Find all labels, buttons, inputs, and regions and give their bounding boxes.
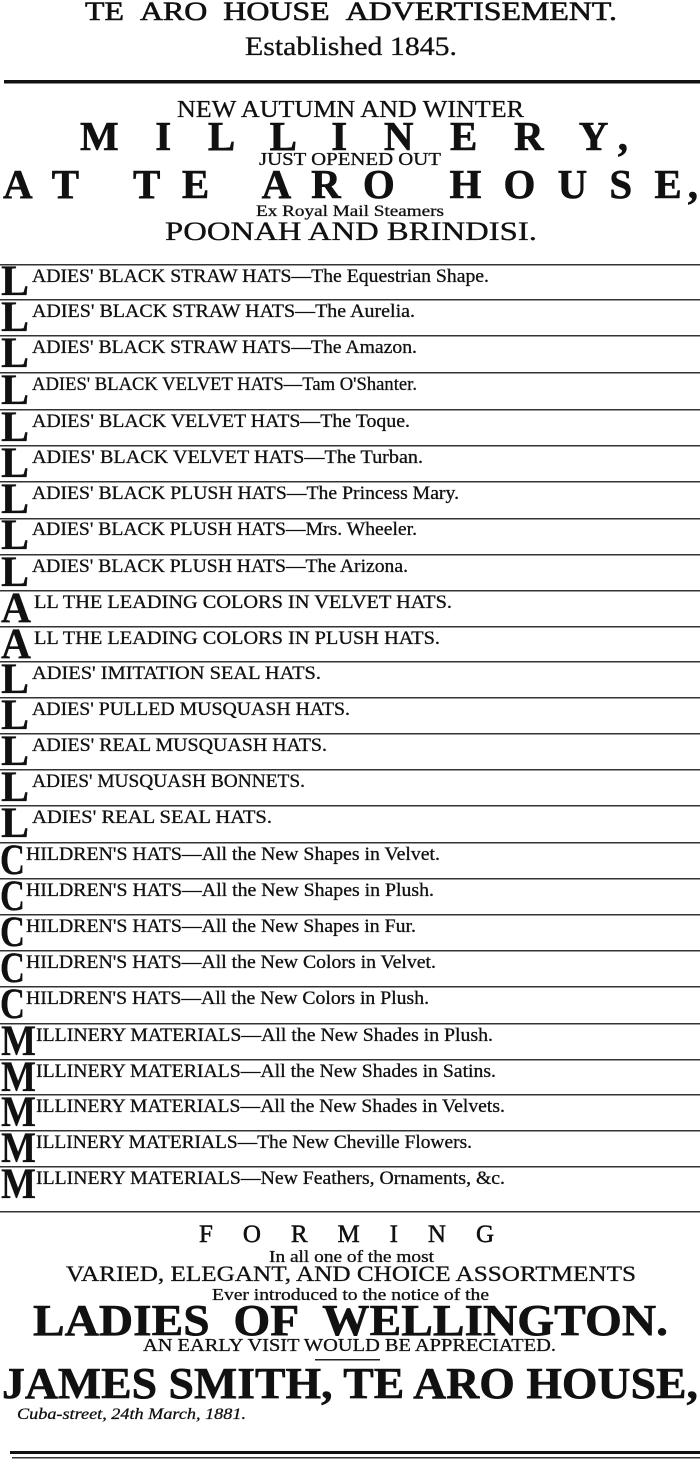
announcement heading (3, 97, 698, 246)
row 14 (0, 728, 700, 775)
row 23: ILLINERY MATERIALS—All the New Shades in Satins. (36, 1062, 496, 1082)
varied assortments: VARIED, ELEGANT, AND CHOICE ASSORTMENTS (66, 1261, 636, 1286)
row 3: L (1, 330, 29, 377)
at te aro house headline: A T T E A R O H O U S E, (3, 161, 698, 207)
james smith te aro house: JAMES SMITH, TE ARO HOUSE, (2, 1359, 698, 1408)
row 20: C (0, 945, 25, 992)
row 4 (0, 367, 700, 414)
row 3 (0, 330, 700, 377)
row 8: ADIES' BLACK PLUSH HATS—Mrs. Wheeler. (32, 520, 417, 540)
row 4: ADIES' BLACK VELVET HATS—Tam O'Shanter. (32, 375, 417, 395)
row 19: HILDREN'S HATS—All the New Shapes in Fur. (26, 917, 416, 937)
row 25 (0, 1125, 700, 1172)
row 22: ILLINERY MATERIALS—All the New Shades in Plush. (36, 1026, 493, 1046)
row 18 (0, 873, 700, 920)
row 10: LL THE LEADING COLORS IN VELVET HATS. (34, 593, 452, 613)
row 19 (0, 909, 700, 956)
row 3: ADIES' BLACK STRAW HATS—The Amazon. (32, 338, 417, 358)
row 17: C (0, 837, 25, 884)
row 26: ILLINERY MATERIALS—New Feathers, Ornaments, &c. (36, 1169, 505, 1189)
row 5: ADIES' BLACK VELVET HATS—The Toque. (32, 412, 410, 432)
row 12 (0, 656, 700, 703)
row 13: ADIES' PULLED MUSQUASH HATS. (32, 700, 350, 720)
ladies of wellington: LADIES OF WELLINGTON. (33, 1296, 668, 1345)
row 16: ADIES' REAL SEAL HATS. (32, 808, 272, 828)
row 14: ADIES' REAL MUSQUASH HATS. (32, 736, 327, 756)
row 2: ADIES' BLACK STRAW HATS—The Aurelia. (32, 302, 415, 322)
row 7 (0, 476, 700, 523)
row 1: ADIES' BLACK STRAW HATS—The Equestrian Shape. (32, 267, 489, 287)
in all one of the most: In all one of the most (269, 1247, 434, 1266)
row 11: A (1, 621, 31, 668)
row 25: M (1, 1125, 36, 1172)
poonah and brindisi: POONAH AND BRINDISI. (165, 217, 537, 246)
row 9: ADIES' BLACK PLUSH HATS—The Arizona. (32, 557, 408, 577)
row 18: HILDREN'S HATS—All the New Shapes in Plush. (26, 881, 434, 901)
row 16 (0, 800, 700, 847)
row 13: L (1, 692, 29, 739)
row 23 (0, 1054, 700, 1101)
row 10: A (1, 585, 31, 632)
row 15: L (1, 764, 29, 811)
row 15 (0, 764, 700, 811)
row 21 (0, 981, 700, 1028)
row 20: HILDREN'S HATS—All the New Colors in Velvet. (26, 953, 436, 973)
row 12: ADIES' IMITATION SEAL HATS. (32, 664, 321, 684)
row 19: C (0, 909, 25, 956)
row 10 (0, 585, 700, 632)
row 14: L (1, 728, 29, 775)
signature (2, 1359, 698, 1423)
row 15: ADIES' MUSQUASH BONNETS. (32, 772, 305, 792)
season line: NEW AUTUMN AND WINTER (177, 97, 524, 123)
row 24 (0, 1089, 700, 1136)
ex royal mail steamers: Ex Royal Mail Steamers (256, 203, 444, 220)
row 21: C (0, 981, 25, 1028)
row 5: L (1, 404, 29, 451)
row 17 (0, 837, 700, 884)
row 5 (0, 404, 700, 451)
row 18: C (0, 873, 25, 920)
row 9: L (1, 549, 29, 596)
row 1 (0, 258, 700, 305)
row 7: L (1, 476, 29, 523)
row 22 (0, 1018, 700, 1065)
row 20 (0, 945, 700, 992)
row 7: ADIES' BLACK PLUSH HATS—The Princess Mary. (32, 484, 459, 504)
list of hats and materials (0, 258, 700, 1208)
row 13 (0, 692, 700, 739)
row 16: L (1, 800, 29, 847)
just opened out: JUST OPENED OUT (259, 149, 441, 169)
row 21: HILDREN'S HATS—All the New Colors in Plush. (26, 989, 429, 1009)
row 2: L (1, 294, 29, 341)
established date: Established 1845. (245, 32, 457, 61)
row 8 (0, 512, 700, 559)
row 17: HILDREN'S HATS—All the New Shapes in Velvet. (26, 845, 440, 865)
row 24: ILLINERY MATERIALS—All the New Shades in Velvets. (36, 1097, 505, 1117)
row 11 (0, 621, 700, 668)
forming: F O R M I N G (199, 1221, 494, 1248)
row 24: M (1, 1089, 36, 1136)
row 26: M (1, 1161, 36, 1208)
row 9 (0, 549, 700, 596)
row 22: M (1, 1018, 36, 1065)
row 8: L (1, 512, 29, 559)
ever introduced: Ever introduced to the notice of the (212, 1285, 489, 1304)
closing statement (33, 1221, 668, 1355)
early visit: AN EARLY VISIT WOULD BE APPRECIATED. (143, 1335, 556, 1355)
row 6: L (1, 440, 29, 487)
row 12: L (1, 656, 29, 703)
row 6 (0, 440, 700, 487)
millinery headline: M I L L I N E R Y, (80, 113, 628, 159)
row 23: M (1, 1054, 36, 1101)
row 6: ADIES' BLACK VELVET HATS—The Turban. (32, 448, 423, 468)
row 4: L (1, 367, 29, 414)
row 1: L (1, 258, 29, 305)
row 2 (0, 294, 700, 341)
row 11: LL THE LEADING COLORS IN PLUSH HATS. (34, 629, 440, 649)
address and date: Cuba-street, 24th March, 1881. (17, 1406, 246, 1423)
masthead (85, 0, 617, 61)
row 25: ILLINERY MATERIALS—The New Cheville Flowers. (36, 1133, 472, 1153)
row 26 (0, 1161, 700, 1208)
